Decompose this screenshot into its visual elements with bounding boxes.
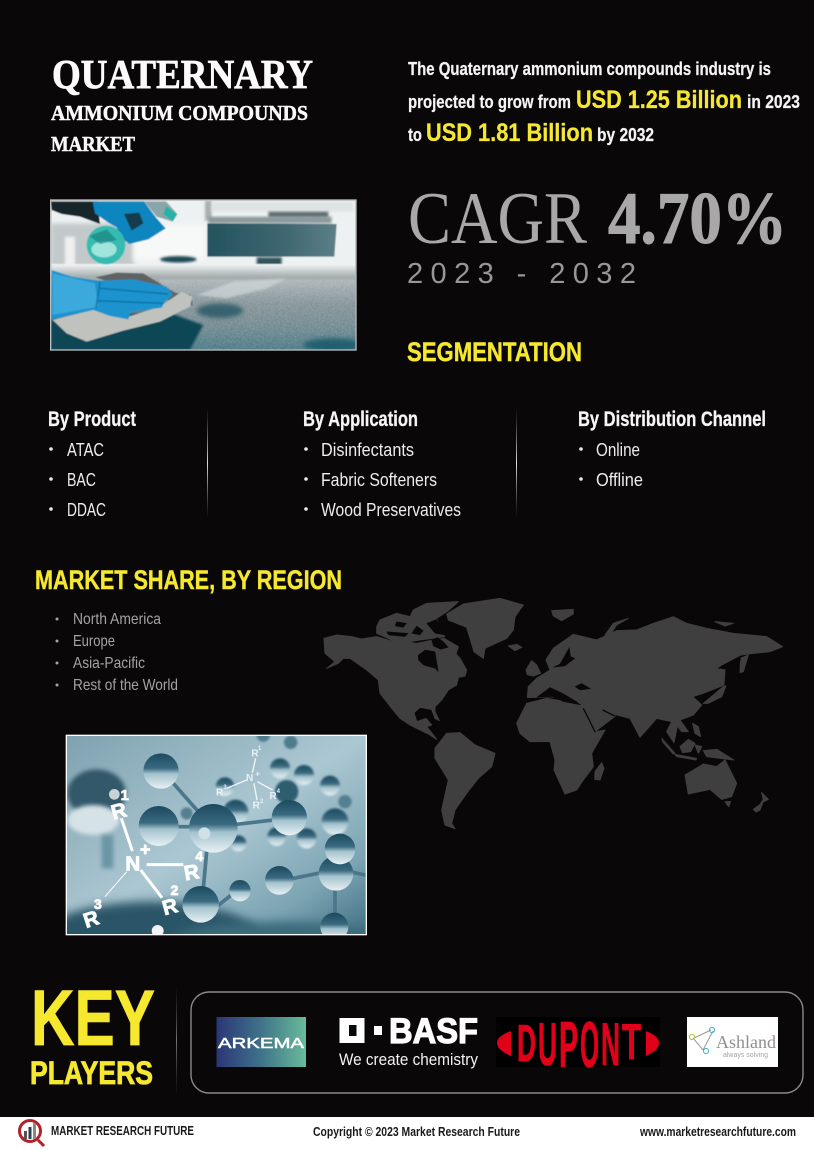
region list: Europe <box>73 633 115 650</box>
photo: molecule with quaternary ammonium formula: 2 <box>260 799 264 805</box>
title <box>51 51 313 156</box>
photo: molecule with quaternary ammonium formula: R <box>160 894 180 920</box>
photo: molecule with quaternary ammonium formula: 4 <box>195 848 203 864</box>
photo: molecule with quaternary ammonium formula: R <box>216 788 223 799</box>
footer: Copyright © 2023 Market Research Future <box>313 1124 520 1139</box>
segment column: by product <box>48 408 136 520</box>
logo: Ashland <box>687 1017 778 1067</box>
growth forecast text <box>408 58 800 147</box>
logo: DuPont <box>496 1008 660 1081</box>
segment column: by product: By Product <box>48 408 136 431</box>
growth forecast text: in 2023 <box>747 91 800 112</box>
region list: Rest of the World <box>73 677 178 694</box>
heading: segmentation: SEGMENTATION <box>407 337 582 367</box>
photo: molecule with quaternary ammonium formula: + <box>140 840 151 860</box>
heading: key players <box>30 973 155 1091</box>
segment column: by application <box>303 408 461 520</box>
photo: molecule with quaternary ammonium formula: N <box>246 773 253 784</box>
world map <box>324 598 783 829</box>
photo: molecule with quaternary ammonium formula: R <box>253 800 260 811</box>
photo: gloved hands disinfecting a surface <box>51 200 363 352</box>
photo: molecule with quaternary ammonium formula: N <box>125 852 140 875</box>
logo: Ashland: always solving <box>723 1052 768 1059</box>
photo: molecule with quaternary ammonium formula: 4 <box>277 789 281 795</box>
heading: key players: PLAYERS <box>30 1055 153 1091</box>
segment column: by distribution channel: Offline <box>596 469 643 490</box>
growth forecast text: by 2032 <box>597 124 654 145</box>
logo: Ashland: Ashland <box>716 1032 776 1052</box>
photo: molecule with quaternary ammonium formula: 2 <box>171 882 179 898</box>
logo: Market Research Future <box>20 1120 44 1146</box>
footer <box>0 1117 814 1150</box>
photo: molecule with quaternary ammonium formula: R <box>109 798 129 825</box>
photo: molecule with quaternary ammonium formula: 3 <box>223 785 227 791</box>
growth forecast text: USD 1.25 Billion <box>576 86 742 114</box>
region list: Asia-Pacific <box>73 655 145 672</box>
logo: BASF <box>339 1012 478 1069</box>
photo: molecule with quaternary ammonium formula: 1 <box>258 746 262 752</box>
growth forecast text: projected to grow from <box>408 91 571 112</box>
region list: North America <box>73 611 161 628</box>
logo: DuPont: D <box>517 1015 536 1073</box>
logo: Arkema: ARKEMA <box>218 1035 304 1052</box>
title: QUATERNARY <box>52 51 313 97</box>
segment column: by distribution channel: Online <box>596 439 640 460</box>
CAGR figure <box>407 178 787 290</box>
logo: DuPont: N <box>601 1011 620 1078</box>
photo: molecule with quaternary ammonium formula <box>66 734 367 936</box>
photo: molecule with quaternary ammonium formula: R <box>81 906 102 933</box>
key players logo panel <box>191 992 803 1093</box>
region list <box>56 611 178 694</box>
photo: molecule with quaternary ammonium formula: + <box>255 770 260 779</box>
footer: MARKET RESEARCH FUTURE <box>51 1123 194 1138</box>
growth forecast text: to <box>408 124 422 145</box>
CAGR figure: CAGR <box>408 178 588 260</box>
segment column: by distribution channel: By Distribution Channel <box>578 408 766 431</box>
logo: DuPont: P <box>559 1008 578 1081</box>
segment column: by product: DDAC <box>67 499 106 520</box>
photo: molecule with quaternary ammonium formula: 1 <box>121 788 129 804</box>
segment column: by product: ATAC <box>67 439 104 460</box>
segment column: by distribution channel <box>578 408 766 490</box>
title: AMMONIUM COMPOUNDS <box>51 101 308 125</box>
heading: key players: KEY <box>31 973 155 1062</box>
logo: DuPont: O <box>580 1008 599 1081</box>
CAGR figure: 4.70% <box>608 178 787 260</box>
growth forecast text: USD 1.81 Billion <box>426 119 593 147</box>
segment column: by application: By Application <box>303 408 418 431</box>
logo: Arkema <box>216 1017 306 1067</box>
CAGR figure: 2023 - 2032 <box>407 258 636 290</box>
heading: market share by region: MARKET SHARE, BY REGION <box>35 565 342 595</box>
segment column: by product: BAC <box>67 469 96 490</box>
logo: BASF: We create chemistry <box>339 1050 478 1069</box>
logo: DuPont: T <box>622 1014 641 1070</box>
photo: molecule with quaternary ammonium formula: 3 <box>94 896 102 912</box>
photo: molecule with quaternary ammonium formula: R <box>182 860 201 885</box>
segment column: by application: Disinfectants <box>321 439 414 460</box>
title: MARKET <box>51 132 136 156</box>
photo: molecule with quaternary ammonium formula: R <box>251 749 259 760</box>
segment column: by application: Fabric Softeners <box>321 469 437 490</box>
logo: DuPont: U <box>538 1011 557 1078</box>
segment column: by application: Wood Preservatives <box>321 499 461 520</box>
logo: BASF: BASF <box>389 1012 478 1051</box>
photo: molecule with quaternary ammonium formula: R <box>269 791 277 802</box>
